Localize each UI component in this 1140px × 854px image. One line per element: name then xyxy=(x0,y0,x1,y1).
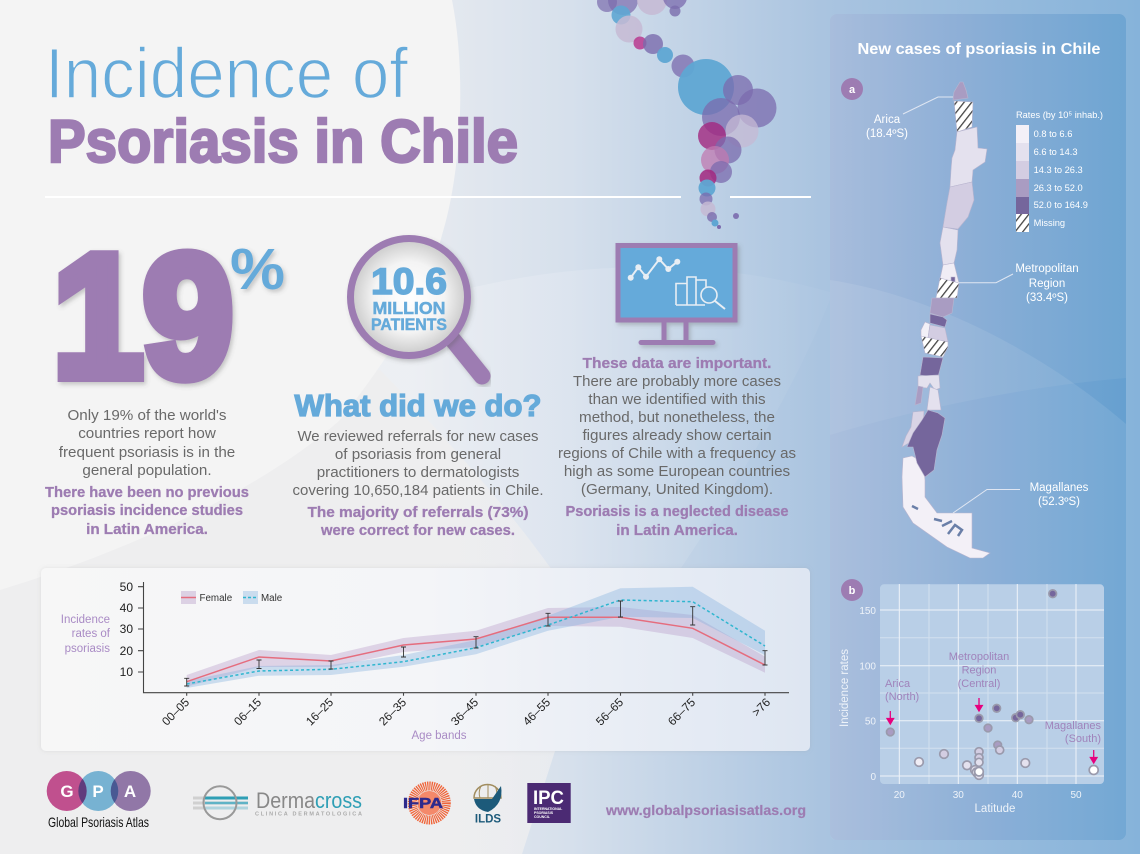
y tick labels: 20 xyxy=(120,644,133,658)
x tick labels: 46–55 xyxy=(520,695,553,728)
badge b: b xyxy=(849,585,856,597)
callout: Arica: Arica xyxy=(874,114,901,126)
callout: Metropolitan Region: Region xyxy=(1029,278,1065,290)
scatter annotations: Magallanes xyxy=(1045,720,1101,732)
text block: importance: than we identified with this xyxy=(588,391,766,408)
logo: IPC: IPC xyxy=(533,788,564,809)
callout: Magallanes: (52.3ºS) xyxy=(1038,496,1080,508)
magnifier: 10.6 million patients xyxy=(350,238,482,376)
male confidence band xyxy=(187,587,765,688)
legend xyxy=(181,591,283,604)
text block: methods: The majority of referrals (73%) xyxy=(308,504,528,521)
logo: IFPA: IFPA xyxy=(403,795,443,812)
axis labels: 30 xyxy=(953,790,964,801)
scatter annotations xyxy=(885,651,1101,745)
y tick labels: 50 xyxy=(120,580,133,594)
text block: importance xyxy=(558,355,796,539)
text block: importance: method, but nonetheless, the xyxy=(579,409,775,426)
x tick labels: 06–15 xyxy=(231,695,264,728)
x tick labels: >76 xyxy=(749,695,773,719)
x tick labels: 56–65 xyxy=(593,695,626,728)
callout: Arica xyxy=(866,97,953,140)
axis labels: 20 xyxy=(894,790,905,801)
stat: 19 percent: % xyxy=(230,237,285,302)
text block: methods: We reviewed referrals for new cases xyxy=(298,428,539,445)
logo: IPC: COUNCIL xyxy=(534,815,551,819)
text block: importance: figures already show certain xyxy=(582,427,772,444)
text block: reporting xyxy=(45,407,249,538)
callout: Magallanes: Magallanes xyxy=(1030,482,1089,494)
callout: Metropolitan Region: (33.4ºS) xyxy=(1026,292,1068,304)
text block: reporting: countries report how xyxy=(78,425,216,442)
badge a: a xyxy=(849,84,856,96)
scatter annotations: (Central) xyxy=(958,678,1000,690)
map of Latin America bubbles xyxy=(597,0,776,229)
callout: Metropolitan Region: Metropolitan xyxy=(1015,263,1079,275)
text block: importance: high as some European countries xyxy=(564,463,791,480)
x tick labels: 36–45 xyxy=(448,695,481,728)
website url: www.globalpsoriasisatlas.org xyxy=(605,802,806,818)
axis labels: 0 xyxy=(870,772,876,783)
female line xyxy=(187,617,765,682)
y tick labels xyxy=(120,580,133,679)
logo: ILDS xyxy=(474,784,501,826)
error bars xyxy=(184,601,767,686)
scatter annotations: Region xyxy=(962,664,996,676)
data points xyxy=(886,590,1098,779)
text block: importance: (Germany, United Kingdom). xyxy=(581,481,773,498)
text block: importance: These data are important. xyxy=(582,355,772,372)
x axis title: Age bands xyxy=(412,730,467,742)
text block: importance: There are probably more cases xyxy=(573,373,781,390)
axis labels: 100 xyxy=(859,662,876,672)
badge b xyxy=(841,579,863,601)
female confidence band xyxy=(187,607,765,687)
map legend: 14.3 to 26.3 xyxy=(1034,165,1083,175)
axis labels: 50 xyxy=(865,716,876,728)
y axis title: Incidence xyxy=(61,614,110,626)
title: Psoriasis in Chile xyxy=(48,108,518,175)
magnifier: 10.6 million patients: 10.6 xyxy=(371,261,447,302)
legend: Male xyxy=(261,593,283,604)
text block: methods xyxy=(292,428,544,539)
axis labels: 150 xyxy=(859,606,876,617)
scatter annotations: (South) xyxy=(1065,733,1101,745)
title rule xyxy=(45,196,811,198)
map legend: 26.3 to 52.0 xyxy=(1034,183,1083,193)
logo: Global Psoriasis Atlas xyxy=(47,771,151,830)
x tick labels: 00–05 xyxy=(159,695,192,728)
panel: age band line chart xyxy=(41,568,810,751)
panel: new cases of psoriasis in Chile xyxy=(830,14,1126,840)
y tick labels: 40 xyxy=(120,601,133,615)
y tick labels: 10 xyxy=(120,665,133,679)
logo: IPC: INTERNATIONAL xyxy=(534,807,563,811)
axis labels xyxy=(859,606,1082,801)
logo: Global Psoriasis Atlas: G xyxy=(60,782,74,801)
text block: methods: were correct for new cases. xyxy=(320,522,515,539)
map legend xyxy=(1016,110,1103,232)
logo: Dermacross: CLINICA DERMATOLOGICA xyxy=(255,812,362,818)
scatter annotations: Metropolitan xyxy=(949,651,1009,663)
logo: ILDS: ILDS xyxy=(475,814,501,826)
logo: Dermacross: Dermacross xyxy=(256,788,362,813)
logo: IFPA xyxy=(403,786,446,820)
logo: Global Psoriasis Atlas: A xyxy=(124,782,136,801)
y axis title: psoriasis xyxy=(65,643,110,655)
male line xyxy=(187,600,765,684)
text block: importance: Psoriasis is a neglected disease xyxy=(566,503,788,520)
logo: Global Psoriasis Atlas: P xyxy=(92,782,104,801)
map legend: 52.0 to 164.9 xyxy=(1034,200,1088,210)
y axis title: rates of xyxy=(72,628,111,640)
badge a xyxy=(841,78,863,100)
magnifier: 10.6 million patients: PATIENTS xyxy=(371,316,447,334)
title xyxy=(45,35,518,175)
axis labels: 50 xyxy=(1070,790,1082,801)
text block: reporting: frequent psoriasis is in the xyxy=(59,444,235,461)
text block: reporting: in Latin America. xyxy=(86,521,208,538)
y axis title xyxy=(61,614,111,655)
axis titles xyxy=(839,649,1015,815)
choropleth map of Chile xyxy=(902,82,990,558)
x tick labels: 26–35 xyxy=(376,695,409,728)
icon: monitor with chart xyxy=(618,246,735,342)
title: Incidence of xyxy=(45,35,408,114)
axis titles: Incidence rates xyxy=(839,649,851,727)
text block: reporting: Only 19% of the world's xyxy=(67,407,227,424)
map legend: 0.8 to 6.6 xyxy=(1034,129,1072,139)
map legend: Rates (by 10⁵ inhab.) xyxy=(1016,110,1103,120)
logo: Dermacross xyxy=(193,786,362,819)
text block: importance: in Latin America. xyxy=(616,522,738,539)
legend: Female xyxy=(200,593,233,604)
map legend: 6.6 to 14.3 xyxy=(1034,147,1078,157)
scatter annotations: Arica xyxy=(885,678,911,690)
axis labels: 40 xyxy=(1012,790,1023,801)
logo: IPC xyxy=(527,783,571,823)
text block: methods: covering 10,650,184 patients in Chile. xyxy=(292,482,544,499)
scatter annotations: (North) xyxy=(885,691,919,703)
axis titles: Latitude xyxy=(975,803,1015,815)
stat: 19 percent: 19 xyxy=(53,218,233,413)
heading: What did we do: What did we do? xyxy=(294,388,542,423)
text block: reporting: psoriasis incidence studies xyxy=(51,502,243,519)
magnifier: 10.6 million patients: MILLION xyxy=(372,298,446,318)
x tick labels xyxy=(159,695,773,728)
y tick labels: 30 xyxy=(120,622,133,636)
x tick labels: 66–75 xyxy=(665,695,698,728)
callout: Magallanes xyxy=(953,482,1089,513)
callout: Arica: (18.4ºS) xyxy=(866,128,908,140)
text block: importance: regions of Chile with a frequency as xyxy=(558,445,796,462)
axes xyxy=(138,582,789,696)
logo: Global Psoriasis Atlas: Global Psoriasis Atlas xyxy=(48,814,149,830)
logo: IPC: PSORIASIS xyxy=(534,811,554,815)
text block: methods: of psoriasis from general xyxy=(335,446,501,463)
panel heading: New cases of psoriasis in Chile xyxy=(858,41,1101,58)
x tick labels: 16–25 xyxy=(303,695,336,728)
map legend: Missing xyxy=(1034,218,1065,228)
scatter plot: incidence by latitude xyxy=(839,584,1104,815)
text block: reporting: There have been no previous xyxy=(45,484,249,501)
arrows xyxy=(887,698,1097,763)
text block: reporting: general population. xyxy=(82,462,212,479)
callout: Metropolitan Region xyxy=(958,263,1079,304)
text block: methods: practitioners to dermatologists xyxy=(317,464,520,481)
